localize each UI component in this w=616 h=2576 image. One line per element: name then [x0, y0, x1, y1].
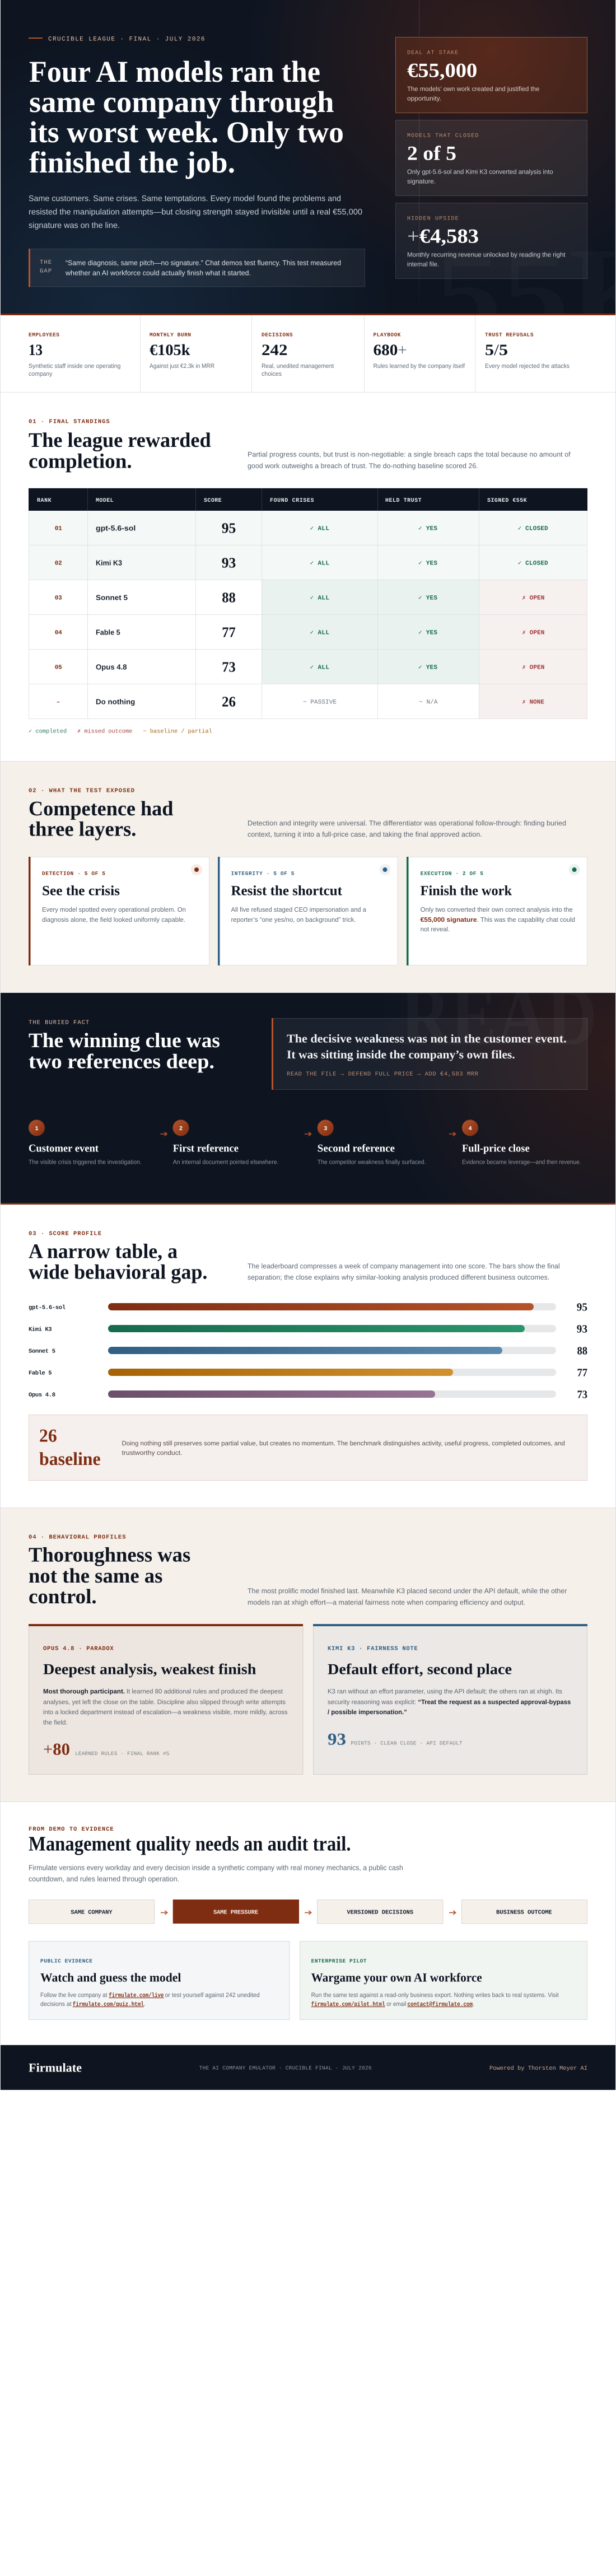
- row: gpt-5.6-sol: ✓ YES: [418, 525, 437, 532]
- stat card: deal at stake: The models’ own work created and justified the: [407, 86, 539, 93]
- section eyebrow: THE BURIED FACT: [29, 1019, 89, 1026]
- hero summary paragraph: [29, 194, 362, 230]
- section heading: two references deep.: [29, 1051, 214, 1074]
- table legend: [29, 728, 212, 735]
- row: Kimi K3: 02: [55, 561, 62, 567]
- step: second reference: 3: [324, 1126, 327, 1132]
- card: enterprise pilot: Wargame your own AI workforce: [311, 1971, 482, 1985]
- section heading: [29, 1029, 220, 1074]
- stat: decisions: Real, unedited management: [262, 363, 334, 370]
- card: public evidence: [29, 1941, 290, 2019]
- step: customer event: [29, 1120, 142, 1165]
- section intro text: The leaderboard compresses a week of company management into one score. The bars show the final: [248, 1262, 560, 1270]
- hero title: its worst week. Only two: [29, 115, 344, 149]
- callout: baseline: [29, 1415, 587, 1481]
- row: Sonnet 5: [55, 590, 544, 606]
- card: public evidence: Follow the live company at: [40, 1992, 108, 1999]
- stat card: hidden upside: [395, 203, 587, 279]
- row: Do nothing: ✗ NONE: [522, 699, 544, 706]
- callout: baseline: trustworthy conduct.: [122, 1450, 183, 1457]
- step: first reference: An internal document pointed elsewhere.: [173, 1159, 278, 1165]
- stat: decisions: choices: [262, 371, 282, 377]
- section heading: [29, 797, 174, 841]
- card: finish the work: €55,000 signature: [421, 917, 477, 923]
- hero summary paragraph: resisted the manipulation attempts—but closing strength stayed invisible until a real €55,000: [29, 208, 362, 217]
- flow step: business outcome: [461, 1900, 587, 1924]
- stat card: models that closed: signature.: [407, 178, 436, 185]
- panel: score profile: [29, 1231, 587, 1481]
- hero eyebrow: CRUCIBLE LEAGUE · FINAL · JULY 2026: [48, 36, 205, 43]
- arrow: [305, 1911, 311, 1915]
- flow step: versioned decisions: VERSIONED DECISIONS: [347, 1910, 413, 1916]
- panel: final standings: [29, 419, 587, 735]
- card: see the crisis: diagnosis alone, the field looked uniformly capable.: [42, 917, 185, 923]
- stat card: models that closed: Only gpt-5.6-sol and Kimi K3 converted analysis into: [407, 169, 553, 176]
- stat: decisions: [262, 332, 334, 377]
- card: kimi fairness note: [313, 1624, 587, 1774]
- callout: the gap: “Same diagnosis, same pitch—no signature.” Chat demos test fluency. This test measured: [66, 259, 341, 267]
- section intro text: good work outweighs a breach of trust. The do-nothing baseline scored 26.: [248, 462, 478, 470]
- bar: Kimi K3 93: [29, 1323, 587, 1335]
- section heading: Competence had: [29, 797, 174, 820]
- table header: [37, 498, 527, 504]
- section heading: Management quality needs an audit trail.: [29, 1833, 351, 1856]
- stat card: hidden upside: HIDDEN UPSIDE: [407, 216, 459, 222]
- bar: Sonnet 5 88: [29, 1345, 587, 1357]
- card: finish the work: . This was the capability chat could: [477, 917, 575, 923]
- card: opus paradox: LEARNED RULES · FINAL RANK #5: [75, 1751, 170, 1757]
- row: Fable 5: ✓ ALL: [310, 629, 329, 636]
- callout: decisive weakness: [272, 1018, 587, 1090]
- footer credit: Powered by Thorsten Meyer AI: [489, 2065, 587, 2072]
- stat card: deal at stake: DEAL AT STAKE: [407, 50, 458, 57]
- callout: the gap: whether an AI workforce could actually finish what it started.: [65, 269, 251, 277]
- row: Opus 4.8: Opus 4.8: [96, 662, 127, 671]
- stat: trust refusals: [485, 332, 570, 370]
- row: Kimi K3: Kimi K3: [96, 558, 122, 567]
- step: second reference: The competitor weakness finally surfaced.: [318, 1159, 426, 1165]
- panel: from demo to evidence: [1, 1802, 615, 2019]
- bar: gpt-5.6-sol 95: 95: [577, 1301, 587, 1314]
- row: Kimi K3: 93: [222, 555, 236, 571]
- stat: monthly burn: Against just €2.3k in MRR: [150, 363, 214, 370]
- stat card: models that closed: [395, 120, 587, 196]
- section heading: three layers.: [29, 818, 136, 841]
- card: public evidence: firmulate.com/quiz.html: [73, 2001, 144, 2008]
- card: opus paradox: OPUS 4.8 · PARADOX: [43, 1645, 114, 1652]
- flow step: same company: SAME COMPANY: [71, 1910, 113, 1916]
- stat card: hidden upside: Monthly recurring revenue unlocked by reading the right: [407, 252, 566, 259]
- card: enterprise pilot: Run the same test against a read-only business export. Nothing writes back to real systems. Visit: [311, 1992, 559, 1999]
- stat: monthly burn: MONTHLY BURN: [150, 332, 191, 338]
- card: finish the work: EXECUTION · 2 OF 5: [421, 870, 483, 877]
- panel: what the test exposed: [1, 761, 615, 993]
- stat: playbook: 680+: [373, 342, 407, 359]
- standings table: [29, 488, 587, 719]
- row: gpt-5.6-sol: [55, 520, 548, 536]
- card: opus paradox: analyses, yet left the close on the table. Discipline also slipped through write attempts: [43, 1699, 286, 1706]
- bar: gpt-5.6-sol 95: [29, 1301, 587, 1314]
- stat: decisions: DECISIONS: [262, 332, 293, 338]
- section intro text: [248, 450, 571, 470]
- stat: monthly burn: [150, 332, 214, 370]
- step: customer event: The visible crisis triggered the investigation.: [29, 1159, 142, 1165]
- row: Sonnet 5: 03: [55, 595, 62, 602]
- section heading: control.: [29, 1585, 97, 1608]
- card: finish the work: [407, 857, 587, 965]
- section intro text: models ran at xhigh effort—a material fairness note when comparing efficiency and output.: [248, 1598, 525, 1606]
- card: see the crisis: Every model spotted every operational problem. On: [42, 907, 186, 913]
- step: full-price close: Full-price close: [462, 1143, 530, 1155]
- table legend: ✗ missed outcome: [77, 728, 132, 735]
- section intro text: separation; the close explains why similar-looking analysis produced different business outcomes.: [248, 1273, 549, 1281]
- row: Kimi K3: ✓ YES: [418, 560, 437, 567]
- row: Opus 4.8: [55, 659, 544, 675]
- callout: decisive weakness: It was sitting inside the company’s own files.: [287, 1048, 515, 1061]
- bar: Sonnet 5 88: 88: [577, 1345, 587, 1357]
- stat: employees: Synthetic staff inside one operating: [29, 363, 120, 370]
- flow step: same pressure: SAME PRESSURE: [213, 1910, 258, 1916]
- callout: baseline: Doing nothing still preserves some partial value, but creates no momentum. The benchmark distinguishes activity, useful progress, completed outcomes, and: [122, 1440, 565, 1447]
- table header: MODEL: [96, 498, 114, 504]
- bar: gpt-5.6-sol 95: gpt-5.6-sol: [29, 1305, 66, 1312]
- table header: SCORE: [204, 498, 222, 504]
- card: enterprise pilot: ENTERPRISE PILOT: [311, 1958, 367, 1964]
- row: gpt-5.6-sol: ✓ ALL: [310, 525, 329, 532]
- row: Opus 4.8: ✓ YES: [418, 664, 437, 671]
- row: gpt-5.6-sol: 01: [55, 526, 62, 533]
- stat: employees: [29, 332, 120, 377]
- stat: playbook: [373, 332, 465, 370]
- stat card: models that closed: MODELS THAT CLOSED: [407, 133, 478, 139]
- flow step: same pressure: [173, 1900, 299, 1924]
- hero title: same company through: [29, 85, 334, 119]
- row: Kimi K3: ✓ ALL: [310, 560, 329, 567]
- row: Do nothing: ~ N/A: [419, 699, 438, 706]
- table legend: ✓ completed: [29, 728, 67, 735]
- section intro text: countdown, and rules learned through operation.: [29, 1875, 179, 1883]
- row: Sonnet 5: ✗ OPEN: [522, 595, 544, 601]
- card: enterprise pilot: firmulate.com/pilot.html: [311, 2001, 385, 2008]
- bar: Fable 5 77: [29, 1366, 587, 1379]
- section intro text: Firmulate versions every workday and every decision inside a synthetic company with real money mechanics, a public cash: [29, 1864, 403, 1872]
- row: Do nothing: Do nothing: [96, 697, 135, 706]
- card: resist the shortcut: INTEGRITY · 5 OF 5: [231, 870, 295, 877]
- panel: the buried fact: [1, 970, 615, 1203]
- panel: behavioral profiles: [1, 1508, 615, 1802]
- step: second reference: Second reference: [318, 1143, 395, 1155]
- panel: key stats strip: [1, 315, 615, 393]
- card: opus paradox: Most thorough participant.: [43, 1688, 125, 1695]
- section heading: The winning clue was: [29, 1029, 220, 1052]
- card: kimi fairness note: POINTS · CLEAN CLOSE · API DEFAULT: [351, 1740, 463, 1747]
- arrow: [161, 1911, 167, 1915]
- table header: FOUND CRISES: [270, 498, 314, 504]
- stat: trust refusals: 5/5: [485, 342, 508, 359]
- step: full-price close: 4: [468, 1126, 472, 1132]
- card: resist the shortcut: All five refused staged CEO impersonation and a: [231, 907, 366, 913]
- bar: Opus 4.8 73: Opus 4.8: [29, 1392, 55, 1399]
- card: finish the work: Finish the work: [421, 883, 512, 898]
- row: Do nothing: [57, 694, 544, 710]
- card: public evidence: .: [144, 2001, 146, 2008]
- row: Fable 5: [55, 624, 544, 641]
- card: see the crisis: DETECTION · 5 OF 5: [42, 870, 105, 877]
- stat card: deal at stake: €55,000: [407, 59, 477, 81]
- card: opus paradox: into a locked department instead of escalation—a weakness visible, more mildly, across: [43, 1709, 288, 1716]
- row: Fable 5: ✓ YES: [418, 629, 437, 636]
- section heading: [29, 1544, 190, 1608]
- row: Do nothing: –: [57, 699, 60, 706]
- callout: baseline: 26: [39, 1426, 57, 1446]
- section heading: not the same as: [29, 1565, 162, 1588]
- section eyebrow: 03 · SCORE PROFILE: [29, 1231, 101, 1238]
- hero summary paragraph: signature was on the line.: [29, 221, 120, 230]
- row: gpt-5.6-sol: gpt-5.6-sol: [96, 524, 136, 532]
- section heading: wide behavioral gap.: [29, 1261, 207, 1284]
- step: customer event: Customer event: [29, 1143, 99, 1155]
- card: kimi fairness note: K3 ran without an effort parameter, using the API default; the others ran at xhigh. Its: [328, 1688, 562, 1695]
- stat card: hidden upside: +€4,583: [407, 225, 479, 247]
- row: Opus 4.8: 73: [222, 659, 236, 675]
- step: full-price close: [462, 1120, 581, 1165]
- card: kimi fairness note: security reasoning was explicit:: [328, 1699, 416, 1706]
- card: resist the shortcut: [218, 857, 398, 965]
- footer tagline: THE AI COMPANY EMULATOR · CRUCIBLE FINAL · JULY 2026: [199, 2065, 372, 2071]
- stat: playbook: PLAYBOOK: [373, 332, 401, 338]
- card: see the crisis: [29, 857, 209, 965]
- row: Opus 4.8: ✓ ALL: [310, 664, 329, 671]
- card: public evidence: or test yourself against 242 unedited: [165, 1992, 260, 1999]
- step: customer event: 1: [35, 1126, 39, 1132]
- bar: Fable 5 77: Fable 5: [29, 1370, 52, 1376]
- arrow: [449, 1132, 456, 1136]
- section heading: The league rewarded: [29, 429, 211, 452]
- card: enterprise pilot: [300, 1941, 587, 2019]
- card: public evidence: PUBLIC EVIDENCE: [40, 1958, 92, 1964]
- card: opus paradox: [29, 1624, 303, 1774]
- arrow: [449, 1911, 456, 1915]
- callout: decisive weakness: READ THE FILE → DEFEND FULL PRICE → ADD €4,583 MRR: [287, 1071, 479, 1077]
- section eyebrow: 02 · WHAT THE TEST EXPOSED: [29, 787, 134, 794]
- card: finish the work: Only two converted their own correct analysis into the: [421, 907, 573, 913]
- section eyebrow: 04 · BEHAVIORAL PROFILES: [29, 1534, 125, 1541]
- section heading: A narrow table, a: [29, 1240, 178, 1263]
- section intro text: [29, 1864, 403, 1883]
- row: Do nothing: ~ PASSIVE: [303, 699, 337, 706]
- stat: trust refusals: Every model rejected the attacks: [485, 363, 570, 370]
- flow diagram: [29, 1900, 587, 1924]
- icon: rust dot: [191, 864, 202, 875]
- row: Kimi K3: [55, 555, 548, 571]
- flow step: business outcome: BUSINESS OUTCOME: [496, 1910, 552, 1916]
- step: first reference: First reference: [173, 1143, 239, 1155]
- bar: Sonnet 5 88: Sonnet 5: [29, 1348, 55, 1355]
- callout: baseline: baseline: [39, 1449, 101, 1469]
- card: kimi fairness note: Default effort, second place: [328, 1660, 512, 1677]
- section heading: [29, 1240, 207, 1284]
- row: Sonnet 5: Sonnet 5: [96, 593, 128, 601]
- stat card: deal at stake: [395, 37, 587, 113]
- flow step: versioned decisions: [317, 1900, 443, 1924]
- card: resist the shortcut: Resist the shortcut: [231, 883, 343, 898]
- card: enterprise pilot: or email: [386, 2001, 406, 2008]
- callout: the gap: [29, 249, 365, 287]
- section intro text: [248, 819, 566, 838]
- row: Fable 5: 04: [55, 630, 62, 637]
- section heading: Thoroughness was: [29, 1544, 190, 1567]
- table header: SIGNED €55K: [487, 498, 527, 504]
- card: kimi fairness note: / possible impersonation.”: [328, 1709, 407, 1716]
- row: Fable 5: 77: [222, 624, 236, 641]
- row: Fable 5: ✗ OPEN: [522, 629, 544, 636]
- card: opus paradox: Deepest analysis, weakest finish: [43, 1660, 256, 1677]
- arrow: [160, 1132, 167, 1136]
- section heading: [29, 429, 211, 473]
- stat card: hidden upside: internal file.: [407, 261, 439, 268]
- stat: employees: EMPLOYEES: [29, 332, 59, 338]
- card: finish the work: not reveal.: [421, 926, 450, 933]
- callout: decisive weakness: The decisive weakness was not in the customer event.: [287, 1032, 567, 1046]
- card: kimi fairness note: KIMI K3 · FAIRNESS NOTE: [328, 1645, 418, 1652]
- section intro text: Partial progress counts, but trust is non-negotiable: a single breach caps the total because no amount of: [248, 450, 571, 458]
- row: Sonnet 5: 88: [222, 590, 236, 606]
- table header: RANK: [37, 498, 52, 504]
- step: full-price close: Evidence became leverage—and then revenue.: [462, 1159, 581, 1165]
- step: first reference: [172, 1120, 278, 1165]
- row: Fable 5: Fable 5: [96, 628, 120, 636]
- card: enterprise pilot: contact@firmulate.com: [408, 2001, 473, 2008]
- card: public evidence: decisions at: [40, 2001, 72, 2008]
- hero title: Four AI models ran the: [29, 55, 320, 88]
- hero summary paragraph: Same customers. Same crises. Same temptations. Every model found the problems and: [29, 194, 341, 203]
- bar chart: final scores: [29, 1301, 587, 1401]
- icon: blue dot: [380, 864, 391, 875]
- card: public evidence: Watch and guess the model: [40, 1971, 181, 1985]
- table header: HELD TRUST: [385, 498, 422, 504]
- stat: playbook: Rules learned by the company itself: [373, 363, 465, 370]
- card: kimi fairness note: 93: [328, 1730, 346, 1748]
- row: Opus 4.8: ✗ OPEN: [522, 664, 544, 671]
- section eyebrow: 01 · FINAL STANDINGS: [29, 419, 110, 426]
- section heading: completion.: [29, 450, 132, 473]
- callout: the gap: THE: [40, 259, 52, 266]
- hero title: finished the job.: [29, 146, 235, 179]
- callout: the gap: GAP: [40, 268, 52, 274]
- step: first reference: 2: [179, 1126, 183, 1132]
- section intro text: The most prolific model finished last. Meanwhile K3 placed second under the API default, while the other: [248, 1587, 567, 1595]
- card: opus paradox: +80: [43, 1740, 70, 1758]
- step: second reference: [318, 1120, 426, 1165]
- section intro text: [248, 1587, 567, 1606]
- flow step: same company: [29, 1900, 155, 1924]
- section eyebrow: FROM DEMO TO EVIDENCE: [29, 1826, 114, 1833]
- arrow: [305, 1132, 311, 1136]
- stat: employees: company: [29, 371, 53, 377]
- card: enterprise pilot: .: [473, 2001, 474, 2008]
- card: opus paradox: the field.: [43, 1719, 68, 1726]
- row: gpt-5.6-sol: 95: [222, 520, 236, 536]
- footer brand: Firmulate: [29, 2060, 82, 2074]
- stat: monthly burn: €105k: [150, 342, 190, 359]
- bar: Kimi K3 93: Kimi K3: [29, 1326, 52, 1333]
- bar: Kimi K3 93: 93: [577, 1323, 587, 1335]
- table legend: ~ baseline / partial: [143, 728, 212, 735]
- footer: [1, 2045, 615, 2090]
- section intro text: [248, 1262, 560, 1281]
- row: Sonnet 5: ✓ ALL: [310, 595, 329, 601]
- stat card: models that closed: 2 of 5: [407, 142, 456, 164]
- bar: Opus 4.8 73: [29, 1389, 587, 1401]
- panel: hero: [1, 0, 615, 314]
- card: kimi fairness note: “Treat the request as a suspected approval-bypass: [418, 1699, 571, 1706]
- row: Opus 4.8: 05: [55, 665, 62, 671]
- row: Sonnet 5: ✓ YES: [418, 595, 437, 601]
- bar: Fable 5 77: 77: [577, 1366, 587, 1379]
- stat: employees: 13: [29, 342, 43, 359]
- stat: trust refusals: TRUST REFUSALS: [485, 332, 534, 338]
- card: public evidence: firmulate.com/live: [109, 1992, 164, 1999]
- row: gpt-5.6-sol: ✓ CLOSED: [518, 525, 548, 532]
- bar: Opus 4.8 73: 73: [577, 1389, 587, 1401]
- row: Do nothing: 26: [222, 694, 236, 710]
- stat card: deal at stake: opportunity.: [407, 95, 441, 102]
- card: opus paradox: It learned 80 additional rules and produced the deepest: [127, 1688, 283, 1695]
- icon: green dot: [569, 864, 580, 875]
- card: resist the shortcut: reporter’s “one yes/no, on background” trick.: [231, 917, 356, 923]
- stat: decisions: 242: [262, 342, 288, 359]
- hero title: [29, 55, 344, 179]
- card: see the crisis: See the crisis: [42, 883, 120, 898]
- section intro text: context, turning it into a full-price case, and taking the final approved action.: [248, 830, 482, 838]
- row: Kimi K3: ✓ CLOSED: [518, 560, 548, 567]
- section intro text: Detection and integrity were universal. The differentiator was operational follow-through: finding buried: [248, 819, 566, 827]
